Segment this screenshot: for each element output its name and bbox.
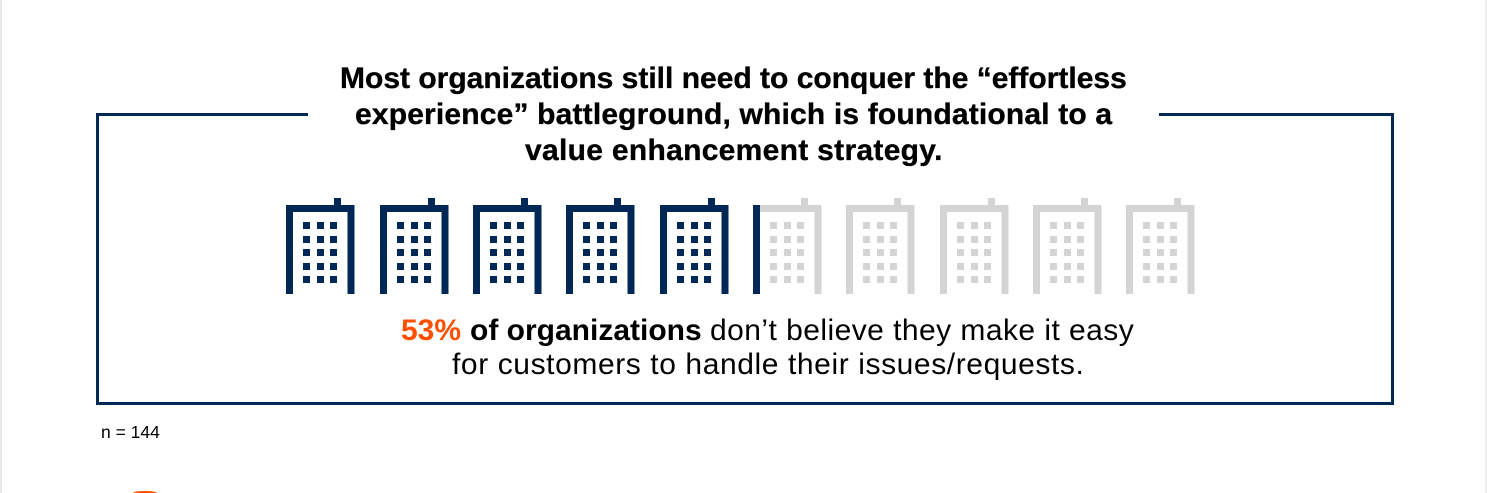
icon row: buildings, 53% highlighted [286, 198, 1194, 294]
statistic text: 53% [401, 314, 461, 347]
icon: building 9 empty [1036, 198, 1098, 294]
heading [340, 62, 1127, 167]
icon: building 8 empty [944, 198, 1005, 294]
heading: experience” battleground, which is foundational to a [355, 98, 1112, 131]
icon: building 5 filled [664, 198, 725, 294]
icon: building 1 filled [290, 198, 351, 294]
statistic text: for customers to handle their issues/requests. [452, 348, 1084, 381]
icon: building 10 empty [1130, 198, 1191, 294]
heading: Most organizations still need to conquer the “effortless [340, 62, 1127, 95]
panel: framed statistic [96, 113, 1394, 405]
icon: building 4 filled [570, 198, 631, 294]
icon: building 6 partial [753, 198, 818, 294]
statistic text: don’t believe they make it easy [710, 314, 1134, 347]
icon: building 3 filled [476, 198, 538, 294]
statistic text: of organizations [470, 314, 702, 347]
statistic text [401, 314, 1134, 381]
heading: value enhancement strategy. [525, 134, 943, 167]
icon: building 2 filled [384, 198, 445, 294]
page edge: left [0, 0, 2, 493]
icon: building 7 empty [850, 198, 911, 294]
footnote: sample size: n = 144 [101, 422, 160, 442]
page edge: right [1485, 0, 1487, 493]
icon: cropped orange shape at bottom [133, 491, 157, 493]
